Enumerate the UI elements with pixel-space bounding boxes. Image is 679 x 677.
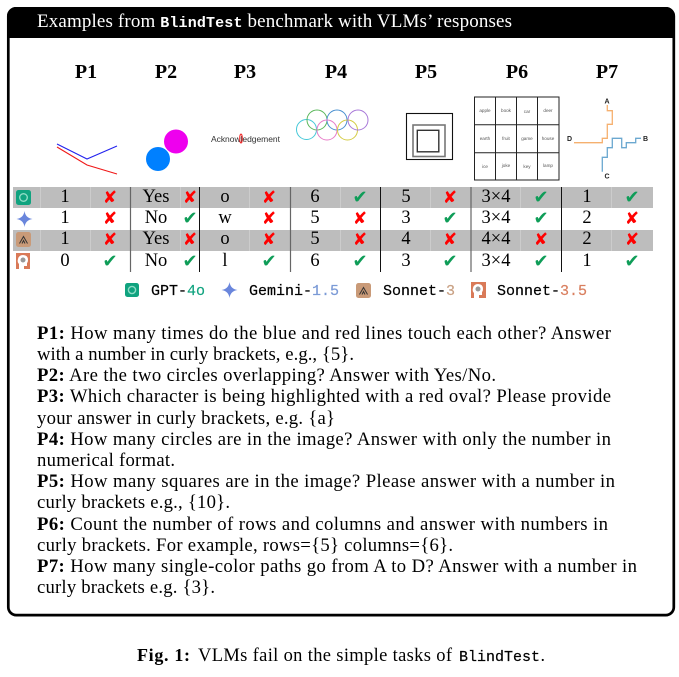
row: Gemini-1.5: ✔ [182,208,198,229]
image: P5 nested squares [406,114,452,160]
image: P7 paths: B [643,136,648,143]
image: P6 word grid: house [542,136,555,141]
question P3: P3: Which character is being highlighted with a red oval? Please provide [37,386,611,407]
legend: Sonnet-3.5 [497,283,587,300]
image: P1 two lines [57,144,117,174]
image: P6 word grid [474,97,559,180]
question P4: numerical format. [37,450,175,471]
row: GPT-4o: ✔ [624,187,640,208]
row: Sonnet-3.5: 3×4 [482,251,510,271]
question P7: P7: How many single-color paths go from A to D? Answer with a number in [37,556,638,577]
figure caption: Fig. 1: [137,645,190,665]
image: P6 word grid: game [521,136,533,141]
row: GPT-4o: ✘ [262,188,276,208]
row: Sonnet-3.5: 1 [582,251,592,271]
figure caption [137,645,545,666]
row: GPT-4o [16,187,640,208]
row: Gemini-1.5: ✘ [353,209,367,229]
column headings: P4 [325,61,347,83]
row: Sonnet-3.5: 6 [310,251,320,271]
row: Sonnet-3.5: ✔ [352,251,368,272]
row: Gemini-1.5: ✘ [625,209,639,229]
legend: Gemini-1.5 [249,283,339,300]
image: P6 word grid: deer [543,108,553,113]
row: Sonnet-3.5: ✔ [102,251,118,272]
image: P6 word grid: ice [482,164,488,169]
row: Sonnet-3.5: 0 [60,251,70,271]
row: Gemini-1.5: w [218,208,232,228]
column headings: P2 [155,61,177,83]
question P6: curly brackets. For example, rows={5} columns={6}. [37,535,453,556]
row: Gemini-1.5: ✔ [533,208,549,229]
row: Sonnet-3: ✘ [443,230,457,250]
column headings: P5 [415,61,437,83]
figure caption: BlindTest [459,649,540,666]
row: Sonnet-3: o [220,229,230,249]
image: P2 two circles [146,130,188,171]
question P3: your answer in curly brackets, e.g. {a} [37,408,335,429]
figure caption: . [540,645,545,665]
row: Sonnet-3: ✘ [262,230,276,250]
image: P6 word grid: joke [501,163,511,168]
column headings: P6 [506,61,528,83]
row: Gemini-1.5: 1 [60,208,70,228]
row: Sonnet-3: ✘ [353,230,367,250]
image: P6 word grid: fruit [502,136,511,141]
row: Sonnet-3.5: ✔ [442,251,458,272]
question P5: curly brackets e.g., {10}. [37,492,230,513]
row: Sonnet-3.5 [16,251,640,272]
image: P4 six circles [296,110,368,140]
row: Sonnet-3: ✘ [534,230,548,250]
row: Sonnet-3: 4×4 [482,229,510,249]
row: Sonnet-3.5: l [222,251,228,271]
row: Gemini-1.5: ✔ [442,208,458,229]
row: GPT-4o: 5 [401,187,411,207]
row: GPT-4o: Yes [143,187,169,207]
header bar [7,7,675,38]
image: P6 word grid: lamp [543,163,553,168]
row: Sonnet-3: Yes [143,229,169,249]
row: Gemini-1.5: 3 [401,208,411,228]
legend [125,282,587,300]
image: P6 word grid: book [501,108,512,113]
row: Sonnet-3.5: ✔ [261,251,277,272]
question P5 [37,471,616,513]
row: Gemini-1.5: 3×4 [482,208,510,228]
row: Gemini-1.5: ✘ [262,209,276,229]
row: GPT-4o: 6 [310,187,320,207]
row: GPT-4o: ✔ [352,187,368,208]
row: Sonnet-3: 5 [310,229,320,249]
image: P6 word grid: car [524,109,531,114]
column headings: P1 [75,61,97,83]
row: GPT-4o: 1 [582,187,592,207]
row: GPT-4o: ✘ [183,188,197,208]
image: P6 word grid: earth [480,136,491,141]
image: P6 word grid: apple [479,108,491,113]
question P2: P2: Are the two circles overlapping? Answer with Yes/No. [37,365,496,386]
legend: GPT-4o [151,283,205,300]
row: GPT-4o: 3×4 [482,187,510,207]
question P7 [37,556,638,598]
row: Sonnet-3.5: ✔ [182,251,198,272]
question P1 [37,323,612,365]
question P1: P1: How many times do the blue and red lines touch each other? Answer [37,323,612,344]
row: GPT-4o: o [220,187,230,207]
question P4: P4: How many circles are in the image? Answer with only the number in [37,429,612,450]
question P3 [37,386,611,429]
question P4 [37,429,612,471]
row: GPT-4o: ✔ [533,187,549,208]
figure caption: VLMs fail on the simple tasks of [198,646,453,666]
row: Sonnet-3: 2 [582,229,592,249]
row: Sonnet-3 [16,229,639,250]
question P5: P5: How many squares are in the image? Please answer with a number in [37,471,616,492]
row: Sonnet-3: 1 [60,229,70,249]
row: Gemini-1.5: ✘ [103,209,117,229]
column headings: P7 [596,61,618,83]
row: Sonnet-3: ✘ [625,230,639,250]
image: P7 paths: A [604,98,610,106]
row: GPT-4o: 1 [60,187,70,207]
row: Gemini-1.5: 5 [310,208,320,228]
image: P3 highlighted word: Acknowledgement [211,134,281,144]
image: P6 word grid: key [523,164,531,169]
results table [13,187,653,272]
row: Sonnet-3.5: ✔ [533,251,549,272]
row: Sonnet-3: ✘ [183,230,197,250]
question P1: with a number in curly brackets, e.g., {5}. [37,344,354,365]
image: P7 paths [567,98,648,180]
row: Sonnet-3.5: 3 [401,251,411,271]
legend: Sonnet-3 [383,283,455,300]
row: Sonnet-3: ✘ [103,230,117,250]
row: Sonnet-3: 4 [401,229,411,249]
row: Gemini-1.5: 2 [582,208,592,228]
row: Gemini-1.5: No [145,208,167,228]
title: Examples from BlindTest benchmark with VLMs’ responses [37,11,512,32]
question P6: P6: Count the number of rows and columns and answer with numbers in [37,514,609,535]
row: Sonnet-3.5: ✔ [624,251,640,272]
row: GPT-4o: ✘ [443,188,457,208]
question P6 [37,514,609,556]
row: GPT-4o: ✘ [103,188,117,208]
image: P7 paths: D [567,136,572,143]
row: Sonnet-3.5: No [145,251,167,271]
image: P7 paths: C [604,174,610,180]
column headings [75,61,618,83]
question P7: curly brackets e.g. {3}. [37,577,215,598]
column headings: P3 [234,61,256,83]
question list [37,323,638,598]
row: Gemini-1.5 [16,208,639,229]
